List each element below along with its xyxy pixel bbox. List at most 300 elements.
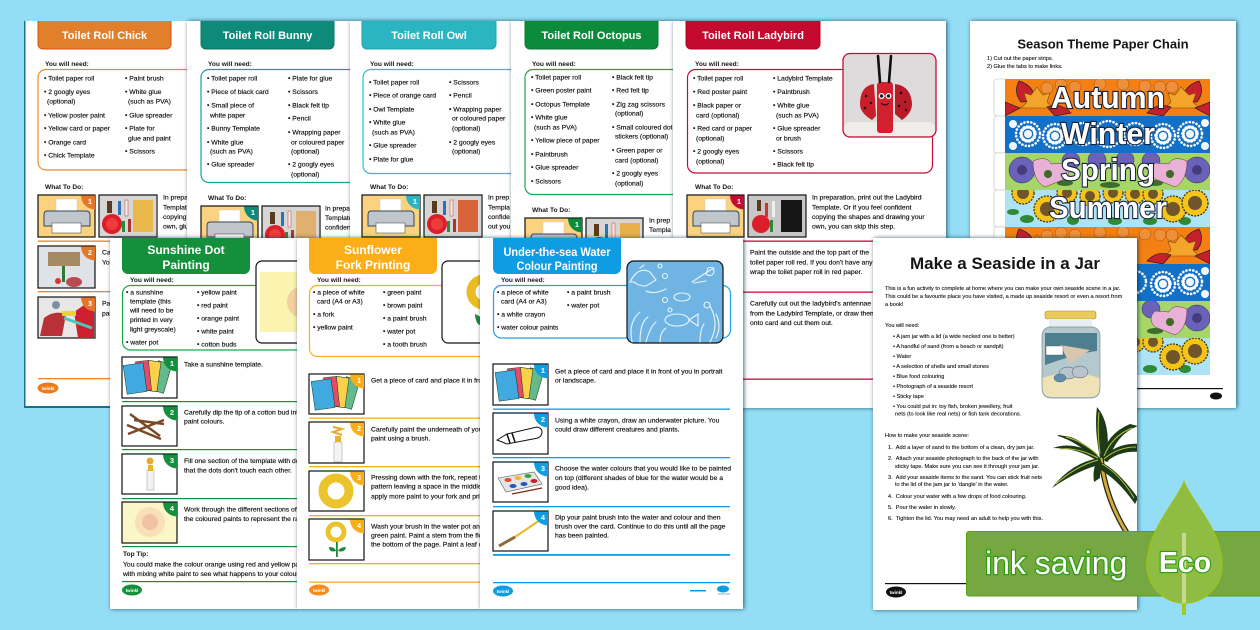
text: you will need list: • Paintbrush bbox=[531, 152, 568, 158]
text: you will need list: printed in very bbox=[130, 317, 173, 324]
text: how to make: 4. Colour your water with a few drops of food colouring. bbox=[888, 494, 1027, 500]
text: you will need list: (optional) bbox=[452, 126, 480, 132]
text: you will need list: • White glue bbox=[207, 140, 244, 146]
text: you will need list: (such as PVA) bbox=[372, 130, 415, 136]
text: you will need list: • Scissors bbox=[531, 178, 562, 186]
heading bbox=[122, 238, 250, 274]
text: you will need list: • White glue bbox=[125, 89, 162, 96]
strip: Winter repeat bbox=[1005, 264, 1210, 301]
step 4: green paint. Paint a stem from the flower to bbox=[371, 532, 501, 540]
step 4: brush over the card. Continue to do this until all the page bbox=[555, 524, 726, 530]
text: how to make: How to make your seaside scene: bbox=[885, 433, 969, 439]
step 3: on top (different shades of blue for the water would be a bbox=[555, 475, 723, 482]
footer badge bbox=[690, 586, 730, 594]
text: you will need bbox=[885, 323, 1022, 418]
text: you will need list: • 2 googly eyes bbox=[288, 162, 335, 168]
text: you will need list: • White glue bbox=[773, 102, 810, 110]
text: you will need list: • Paintbrush bbox=[773, 89, 810, 96]
text: you will need list: card (A4 or A3) bbox=[317, 298, 363, 306]
step 2: 2 bbox=[357, 424, 361, 433]
panel: Toilet Roll Octopus worksheet bbox=[524, 21, 673, 238]
text: you will need list: • Owl Template bbox=[369, 106, 415, 114]
text: top tip: You could make the colour orange using red and yellow paint. Experiment bbox=[123, 562, 345, 568]
text: what to do: In prep bbox=[488, 194, 509, 202]
text: you will need list: • Yellow poster paint bbox=[44, 112, 105, 120]
text: what to do: own, you can skip this step. bbox=[812, 224, 895, 230]
text: you will need list: • 2 googly eyes bbox=[449, 140, 496, 146]
text: you will need list: card (A4 or A3) bbox=[501, 298, 547, 306]
text: you will need list: (optional) bbox=[615, 180, 643, 188]
text: you will need list: (optional) bbox=[696, 158, 724, 166]
page shadow bbox=[110, 238, 297, 609]
text: how to make: 6. Tighten the lid. You may need an adult to help you with this. bbox=[888, 516, 1043, 522]
text: you will need list: • Toilet paper roll bbox=[693, 76, 744, 82]
text: you will need: • Blue food colouring bbox=[893, 374, 944, 380]
text: you will need list: You will need: bbox=[532, 61, 576, 68]
text: what to do steps: In preparation bbox=[163, 194, 205, 202]
text: you will need list: white paper bbox=[209, 112, 246, 120]
text: what to do bbox=[695, 184, 925, 230]
text: you will need list: • a sunshine bbox=[126, 290, 163, 296]
text: step 3: onto card and cut them out. bbox=[750, 320, 833, 327]
step 3: 3 bbox=[357, 473, 361, 482]
text: you will need list: • Scissors bbox=[125, 148, 156, 156]
text: you will need list: You will need: bbox=[317, 277, 361, 284]
text: how to make: 5. Pour the water in slowly. bbox=[888, 505, 956, 511]
text: you will need list: • red paint bbox=[197, 302, 228, 310]
text: you will need list: • Red felt tip bbox=[612, 88, 649, 94]
text: what to do: confiden bbox=[325, 224, 351, 232]
text: you will need list: You will need: bbox=[130, 277, 174, 284]
text: you will need list: You will need: bbox=[45, 61, 89, 68]
heading: Season Theme Paper Chain bbox=[1017, 36, 1189, 52]
text: you will need list: • Green paper or bbox=[612, 148, 663, 154]
step 1 bbox=[493, 364, 722, 405]
text: you will need list: (such as PVA) bbox=[776, 112, 819, 120]
text: what to do: What To Do: bbox=[208, 195, 246, 202]
text: you will need list bbox=[37, 62, 187, 171]
text: what to do steps: Paint bbox=[102, 300, 118, 308]
panel: Season Theme Paper Chain worksheet bbox=[970, 21, 1236, 408]
text: you will need list: • Octopus Template bbox=[531, 102, 590, 108]
text: you will need list: • Red card or paper bbox=[693, 126, 753, 132]
text: you will need list: You will need: bbox=[370, 61, 414, 68]
text: you will need list: • Yellow card or paper bbox=[44, 126, 111, 132]
step 4: Work through the different sections of the template, using bbox=[184, 506, 356, 514]
text: what to do steps: What To Do: bbox=[45, 184, 83, 191]
step 4: 4 bbox=[170, 504, 175, 513]
text: what to do steps: paint bbox=[102, 310, 117, 318]
step 3: Fill one section of the template with dots, making sure bbox=[184, 458, 346, 465]
icon: printer step 1 bbox=[524, 217, 583, 238]
text: you will need list: • Zig zag scissors bbox=[612, 102, 666, 108]
text: you will need list: card (optional) bbox=[615, 158, 658, 164]
text: what to do: In prep bbox=[649, 218, 670, 224]
photo: step 2 roll bbox=[38, 246, 95, 288]
icon: supplies photo bbox=[99, 195, 157, 237]
dividers bbox=[309, 418, 480, 583]
text: you will need list: • Glue spreader bbox=[207, 162, 255, 168]
strip: Summer repeat bbox=[1005, 330, 1210, 375]
text: you will need: • Photograph of a seaside resort bbox=[893, 384, 973, 390]
text: you will need list: • Green poster paint bbox=[531, 88, 592, 94]
step 3: apply more paint to your fork and print again. bbox=[371, 494, 506, 500]
text: you will need list: • Plate for glue bbox=[288, 76, 333, 82]
text: you will need list: light greyscale) bbox=[130, 326, 176, 334]
step 3: good idea). bbox=[555, 484, 589, 492]
strip: Spring: Spring bbox=[1061, 152, 1155, 187]
photo: watercolour sea art bbox=[627, 261, 723, 343]
logo: twinkl bbox=[890, 590, 902, 595]
heading bbox=[200, 21, 334, 50]
text: you will need list: • Pencil bbox=[288, 116, 311, 122]
step 1 bbox=[309, 374, 510, 414]
text: you will need: • A selection of shells and small stones bbox=[893, 364, 989, 370]
heading: Toilet Roll Bunny bbox=[223, 30, 313, 42]
page shadow bbox=[480, 238, 743, 609]
photo: sunshine dot art bbox=[256, 261, 319, 343]
step 1 bbox=[122, 357, 263, 398]
step 4 bbox=[309, 519, 523, 560]
text: you will need list: • Plate for glue bbox=[369, 156, 414, 164]
text: intro: a book! bbox=[885, 302, 904, 308]
logo: twinkl bbox=[497, 589, 509, 594]
heading: Sunflower bbox=[344, 243, 402, 257]
text: top tip: with mixing white paint to see what happens to your colours. bbox=[122, 571, 304, 578]
step 2 bbox=[122, 406, 334, 446]
banner: ink saving bbox=[966, 532, 1260, 596]
step 1: Take a sunshine template. bbox=[184, 362, 263, 368]
text: what to do: confide bbox=[488, 214, 510, 221]
photo: step 3 painting: 3 bbox=[88, 299, 92, 308]
strip: Spring bbox=[1005, 151, 1210, 190]
step 1: Get a piece of card and place it in front of you in portrait bbox=[555, 368, 722, 376]
text: you will need list: • 2 googly eyes bbox=[693, 148, 740, 156]
text: step 2 bbox=[749, 250, 873, 276]
text: you will need list: • yellow paint bbox=[197, 290, 237, 296]
text: step 3: Carefully cut out the ladybird's antennae bbox=[750, 300, 871, 308]
step 3: that the dots don't touch each other. bbox=[184, 468, 292, 474]
heading: Fork Printing bbox=[336, 258, 410, 272]
text: you will need list: (optional) bbox=[291, 148, 319, 156]
heading: Sunshine Dot bbox=[147, 243, 225, 257]
strip: Spring repeat bbox=[1005, 299, 1210, 338]
step 3: 3 bbox=[170, 456, 174, 465]
text: what to do steps: You could bbox=[102, 260, 132, 266]
text: you will need list: or brush bbox=[776, 136, 801, 142]
logo bbox=[122, 584, 142, 596]
text: you will need list: (optional) bbox=[452, 148, 480, 156]
icon: supplies photo bbox=[585, 217, 644, 238]
text: you will need list: • Glue spreader bbox=[125, 112, 173, 120]
text: step 2: toilet paper roll red. If you don't have any bbox=[750, 260, 873, 266]
text: you will need list: • cotton buds bbox=[197, 342, 237, 348]
step 1: 1 bbox=[541, 366, 545, 375]
strip: Autumn: Autumn bbox=[1051, 80, 1165, 115]
text: top tip bbox=[122, 551, 345, 578]
page shadow bbox=[673, 21, 946, 408]
dividers bbox=[493, 408, 730, 583]
step 4: the coloured paints to represent the rays. bbox=[184, 516, 308, 523]
text: you will need list: • Black felt tip bbox=[288, 102, 329, 110]
text: you will need list: • Piece of black card bbox=[207, 89, 269, 96]
text: you will need list: • White glue bbox=[369, 120, 406, 126]
text: step 2: wrap the toilet paper roll in red paper. bbox=[749, 269, 862, 276]
text: you will need list bbox=[524, 62, 673, 196]
text: you will need: • A jam jar with a lid (a wide necked one is better) bbox=[893, 334, 1015, 340]
text: you will need list: • a paint brush bbox=[567, 290, 611, 296]
text: you will need list bbox=[200, 62, 350, 184]
logo bbox=[309, 584, 329, 596]
strip: Winter bbox=[1005, 116, 1210, 153]
step 2: 2 bbox=[170, 408, 174, 417]
icon: supplies photo bbox=[261, 205, 321, 238]
text: you will need list: • a white crayon bbox=[497, 312, 545, 318]
photo: sunflower print bbox=[442, 261, 502, 343]
text: what to do bbox=[208, 195, 353, 232]
text: intro: This is a fun activity to complete at home where you can make your own seaside scene in a jar. bbox=[885, 286, 1121, 292]
text: what to do: In prepa bbox=[325, 206, 350, 212]
step 4: has been painted. bbox=[555, 532, 609, 540]
page shadow bbox=[511, 21, 673, 408]
text: you will need list bbox=[122, 277, 342, 350]
text: you will need list: • Red poster paint bbox=[693, 89, 747, 96]
text: you will need list: • White glue bbox=[531, 114, 568, 122]
text: you will need list: • Toilet paper roll bbox=[44, 76, 95, 82]
text: you will need list bbox=[688, 61, 932, 173]
step 4: the bottom of the page. Paint a leaf or two. bbox=[371, 542, 499, 548]
text: you will need list: • Small piece of bbox=[207, 102, 254, 110]
step 2 bbox=[493, 413, 720, 454]
logo bbox=[38, 382, 58, 394]
text: you will need list: • Scissors bbox=[288, 89, 319, 96]
strip: Summer: Summer bbox=[1049, 190, 1167, 225]
text: what to do: Template. Or if you feel confident bbox=[812, 204, 911, 212]
text: you will need list: (optional) bbox=[47, 98, 75, 106]
text: you will need list: • Scissors bbox=[449, 80, 480, 86]
page shadow bbox=[297, 238, 480, 609]
text: you will need list: • Plate for bbox=[125, 126, 155, 132]
text: you will need list: • Black felt tip bbox=[773, 162, 814, 168]
text: instructions: 1) Cut out the paper strips. bbox=[987, 56, 1054, 62]
text: what to do: Template bbox=[325, 215, 353, 222]
logo: twinkl bbox=[42, 386, 54, 391]
step 3: Pressing down with the fork, repeat to create a circular bbox=[371, 474, 536, 482]
text: you will need list: • brown paint bbox=[383, 302, 423, 310]
icon: printer step 1 bbox=[38, 195, 95, 237]
text: what to do: In preparation, print out the Ladybird bbox=[812, 194, 922, 202]
step 2: could draw different creatures and plants. bbox=[555, 426, 680, 434]
text: what to do: Templa bbox=[488, 204, 510, 212]
text: what to do: copying the shapes and drawing your bbox=[812, 214, 925, 221]
step 2: Carefully paint the underneath of your fork in yellow bbox=[371, 426, 526, 434]
text: what to do steps: own, glue bbox=[163, 224, 192, 230]
page shadow bbox=[350, 21, 511, 408]
panel: Sunflower Fork Printing worksheet bbox=[309, 228, 536, 596]
text: you will need list: • green paint bbox=[383, 290, 421, 296]
heading bbox=[309, 228, 437, 274]
step 4 bbox=[122, 502, 356, 543]
heading: Colour Painting bbox=[516, 259, 598, 273]
text: you will need list: glue and paint bbox=[128, 136, 171, 142]
dividers bbox=[743, 240, 873, 380]
text: you will need list: You will need: bbox=[501, 277, 545, 284]
text: Eco: Eco bbox=[1159, 547, 1211, 579]
text: what to do: out you bbox=[488, 224, 511, 230]
panel: Make a Seaside in a Jar worksheet bbox=[885, 254, 1140, 598]
step 2: paint using a brush. bbox=[371, 436, 430, 442]
panel: Toilet Roll Bunny worksheet bbox=[200, 21, 350, 238]
heading bbox=[524, 21, 658, 50]
text: how to make: 3. Add your seaside items to the sand. You can stick fruit nets bbox=[888, 475, 1042, 481]
text: you will need: nets (to look like real nets) or fish tank decorations. bbox=[895, 412, 1022, 418]
text: what to do: What To Do: bbox=[370, 184, 408, 191]
text: step 3: from the Ladybird Template, or draw them bbox=[750, 310, 876, 318]
icon: printer step 1: 1 bbox=[575, 220, 579, 229]
heading bbox=[362, 21, 496, 50]
text: you will need list: • orange paint bbox=[197, 316, 239, 322]
page shadow bbox=[873, 238, 1137, 610]
text: you will need list: • yellow paint bbox=[313, 324, 353, 332]
photo: step 3 painting bbox=[38, 297, 95, 338]
paper strip tabs bbox=[994, 79, 1005, 375]
text: you will need list bbox=[310, 277, 530, 356]
text: you will need list: • white paint bbox=[197, 328, 234, 336]
text: you will need list: (such as PVA) bbox=[534, 124, 577, 132]
text: ink saving: ink saving bbox=[985, 545, 1127, 581]
panel: Toilet Roll Owl worksheet bbox=[361, 21, 511, 238]
text: you will need list: • Toilet paper roll bbox=[531, 74, 582, 82]
step 2: paint colours. bbox=[184, 418, 225, 426]
strip: Autumn bbox=[1005, 78, 1210, 116]
logo: twinkl bbox=[313, 588, 325, 593]
step 4: 4 bbox=[357, 521, 362, 530]
text: you will need list: • Scissors bbox=[773, 148, 804, 156]
text: you will need list: (such as PVA) bbox=[210, 148, 253, 156]
panel: Toilet Roll Chick worksheet bbox=[24, 21, 187, 408]
icon: supplies photo bbox=[424, 195, 482, 237]
text: what to do: What To Do: bbox=[695, 184, 733, 191]
text: what to do steps: copying the bbox=[163, 214, 198, 221]
text: you will need list: • Toilet paper roll bbox=[369, 80, 420, 86]
text: step 2: Paint the outside and the top part of the bbox=[750, 250, 869, 256]
text: you will need: • You could put in: toy fish, broken jewellery, fruit bbox=[893, 404, 1013, 410]
panel: Under-the-sea Water Colour Painting worksheet bbox=[493, 228, 731, 596]
panel: Sunshine Dot Painting worksheet bbox=[121, 238, 297, 596]
text: what to do steps: Template. Or bbox=[163, 204, 203, 212]
text: how to make bbox=[885, 433, 1043, 522]
text: you will need: • A handful of sand (from a beach or sandpit) bbox=[893, 344, 1004, 350]
text: you will need list: • water pot bbox=[567, 302, 599, 310]
step 3: Choose the water colours that you would like to be painted bbox=[555, 466, 731, 472]
dividers bbox=[38, 240, 110, 380]
icon: printer step 1: 1 bbox=[737, 197, 741, 206]
text: you will need list: • Yellow piece of paper bbox=[531, 138, 600, 144]
text: how to make: to the lid of the jam jar to 'dangle' in the water. bbox=[895, 482, 1009, 488]
text: you will need list: You will need: bbox=[208, 61, 252, 68]
heading: Toilet Roll Chick bbox=[62, 30, 148, 42]
text: you will need list: (optional) bbox=[696, 136, 724, 142]
text: you will need list: • Bunny Template bbox=[207, 126, 260, 132]
text: you will need list: • Chick Template bbox=[44, 152, 95, 160]
text: you will need list: • water pot bbox=[383, 328, 415, 336]
heading: Toilet Roll Octopus bbox=[541, 30, 642, 42]
photo: step 2 roll: 2 bbox=[88, 248, 92, 257]
step 1: 1 bbox=[357, 376, 361, 385]
step 2 bbox=[309, 422, 526, 463]
text: you will need list: • Glue spreader bbox=[531, 164, 579, 172]
text: you will need list: • Ladybird Template bbox=[773, 76, 833, 82]
text: you will need list: • Paint brush bbox=[125, 76, 164, 82]
strip: Autumn repeat bbox=[1005, 226, 1210, 264]
text: you will need list: • Orange card bbox=[44, 140, 86, 146]
icon: palm tree bbox=[1052, 407, 1140, 533]
text: you will need list: • Black felt tip bbox=[612, 74, 653, 82]
text: you will need list: • Wrapping paper bbox=[288, 130, 341, 136]
text: you will need list: • Toilet paper roll bbox=[207, 76, 258, 82]
text: you will need: You will need: bbox=[885, 323, 920, 329]
heading: Toilet Roll Owl bbox=[391, 30, 467, 42]
step 3 bbox=[309, 471, 536, 511]
footer bbox=[1130, 388, 1223, 400]
text: what to do: Templa bbox=[649, 227, 671, 234]
text: you will need list: • 2 googly eyes bbox=[44, 89, 91, 96]
heading bbox=[493, 228, 621, 274]
step 2: 2 bbox=[541, 415, 545, 424]
text: you will need list: • Glue spreader bbox=[369, 142, 417, 150]
step 1: 1 bbox=[170, 359, 174, 368]
heading: Painting bbox=[162, 258, 210, 272]
step 3 bbox=[122, 454, 346, 494]
text: you will need list: (such as PVA) bbox=[128, 98, 171, 106]
text: you will need list: • a tooth brush bbox=[383, 342, 427, 348]
step 4: 4 bbox=[541, 513, 546, 522]
icon: Eco drop bbox=[1147, 482, 1222, 615]
text: you will need list bbox=[362, 62, 511, 174]
icon: printer step 1 bbox=[362, 195, 420, 237]
text: you will need list: stickers (optional) bbox=[615, 134, 668, 140]
dividers bbox=[122, 401, 297, 582]
icon: printer step 1: 1 bbox=[88, 197, 92, 206]
text: you will need list: • Glue spreader bbox=[773, 126, 821, 132]
step 4: Dip your paint brush into the water and colour and then bbox=[555, 514, 721, 522]
text: you will need list: template (this bbox=[130, 298, 171, 306]
text: how to make: 1. Add a layer of sand to the bottom of a clean, dry jam jar. bbox=[888, 445, 1035, 451]
text: you will need list bbox=[494, 277, 730, 338]
text: you will need list: • Wrapping paper bbox=[449, 106, 502, 114]
text: intro bbox=[885, 286, 1123, 308]
text: you will need list: • a piece of white bbox=[497, 290, 549, 296]
text: how to make: sticky tape. Make sure you can see it through your jam jar. bbox=[895, 464, 1040, 470]
photo: ladybird craft bbox=[843, 54, 936, 137]
text: what to do bbox=[370, 184, 511, 230]
text: instructions bbox=[987, 56, 1063, 70]
text: you will need list: • 2 googly eyes bbox=[612, 170, 659, 178]
text: you will need list: • water colour paints bbox=[497, 324, 559, 332]
text: how to make: 2. Attach your seaside photograph to the back of the jar with bbox=[888, 456, 1039, 462]
text: what to do bbox=[532, 207, 671, 234]
step 3: 3 bbox=[541, 464, 545, 473]
step 4 bbox=[493, 511, 726, 551]
text: you will need list: • Pencil bbox=[449, 92, 472, 100]
step 4: Wash your brush in the water pot and then use the bbox=[371, 524, 523, 530]
text: you will need list: • water pot bbox=[126, 340, 158, 346]
icon: printer step 1 bbox=[687, 195, 744, 237]
step 3 bbox=[493, 462, 731, 502]
logo bbox=[493, 586, 513, 596]
step 3: pattern leaving a space in the middle. You may need to bbox=[371, 484, 536, 490]
heading bbox=[38, 21, 172, 50]
